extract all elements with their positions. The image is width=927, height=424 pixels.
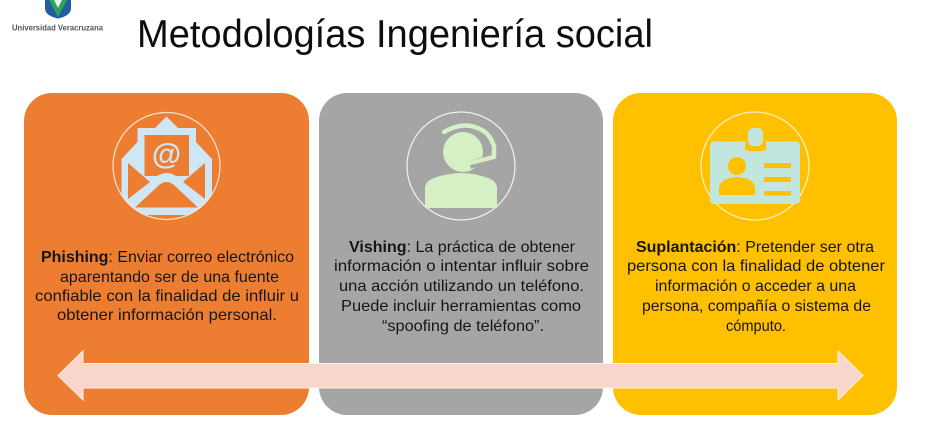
text: Suplantación description: persona con la finalidad de obtener (627, 258, 885, 275)
text: Vishing description: información o intentar influir sobre (334, 258, 589, 275)
text: Vishing description: “spoofing de teléfono”. (382, 318, 544, 335)
text: Vishing description: Puede incluir herramientas como (341, 298, 581, 315)
panel: Suplantación (613, 93, 897, 415)
text: Suplantación description (627, 239, 885, 335)
text: Phishing description: Phishing: Enviar correo electrónico (41, 249, 294, 266)
text: Suplantación description: cómputo. (726, 318, 786, 335)
text: Suplantación description: Suplantación: Pretender ser otra (636, 239, 874, 256)
icon: ID badge (701, 112, 809, 220)
logo: Universidad Veracruzana (12, 0, 103, 32)
panel: Vishing (319, 93, 603, 415)
text: Suplantación description: persona, compañía o sistema de (642, 298, 871, 315)
text: Phishing description: aparentando ser de una fuente (60, 269, 279, 286)
text: Vishing description: Vishing: La práctica de obtener (349, 239, 575, 256)
icon: open envelope with at sign (112, 112, 221, 220)
panel: Phishing (24, 93, 309, 415)
text: Phishing description: obtener información personal. (57, 307, 277, 324)
arrow: double-headed horizontal (58, 351, 863, 400)
icon: open envelope with at sign: @ (152, 138, 181, 171)
logo: Universidad Veracruzana: Universidad Veracruzana (12, 22, 103, 32)
text: Phishing description (35, 249, 299, 324)
text: Vishing description (334, 239, 589, 335)
text: Phishing description: confiable con la finalidad de influir u (35, 288, 299, 305)
text: Vishing description: una acción utilizando un teléfono. (339, 278, 584, 295)
icon: agent with headset (407, 112, 515, 220)
title: Metodologías Ingeniería social (137, 13, 653, 56)
text: Suplantación description: información o acceder a una (655, 278, 856, 295)
